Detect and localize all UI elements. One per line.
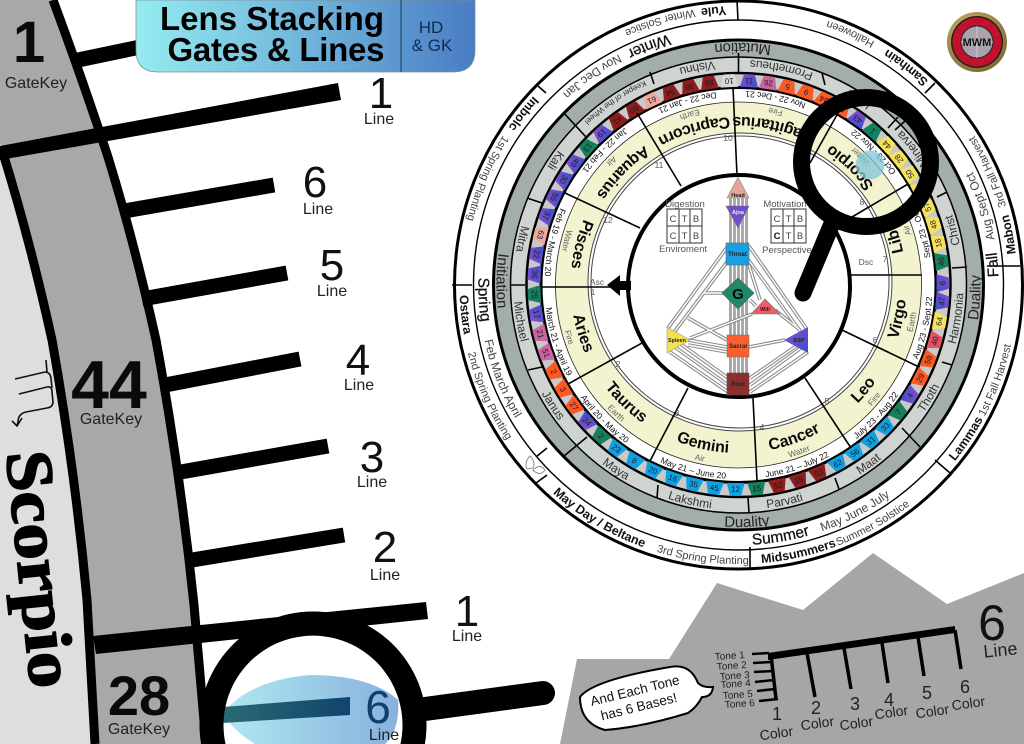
digestion and environment grid: T (682, 231, 688, 242)
line numbers: 6 (303, 158, 327, 207)
gate band: 59 (923, 354, 935, 366)
motivation and perspective grid: Perspective (762, 245, 812, 256)
line numbers: 2 (373, 523, 397, 572)
gate band: 14 (835, 102, 848, 115)
center: spleen (667, 327, 690, 353)
digestion and environment grid: B (693, 231, 699, 242)
gate band: 27 (568, 400, 581, 413)
line numbers: Line (303, 201, 333, 218)
gate band: 17 (531, 309, 541, 320)
gate band: 3 (558, 385, 568, 394)
arrow: ascendant pointer (607, 275, 631, 296)
center: ESP: ESP (793, 338, 805, 344)
motivation and perspective grid: B (797, 214, 803, 225)
zodiac elements: Water (787, 443, 811, 460)
big 6 line label: 6 (978, 595, 1006, 651)
tone labels: Tone 1 (714, 650, 746, 663)
gate band: 12 (731, 485, 741, 494)
motivation and perspective grid: T (786, 231, 792, 242)
season names and months: Spring (475, 278, 490, 322)
gate band: 44 (880, 138, 893, 151)
date ring labels: March 21 - April 19 (544, 307, 575, 377)
date ring labels: June 21 – July 22 (764, 449, 831, 479)
magnifier: upper lens on Scorpio (802, 98, 930, 293)
season names and months: Aug Sept Oct (966, 172, 995, 240)
motivation and perspective grid: Motivation (763, 199, 807, 210)
zodiac elements: Fire (563, 329, 576, 346)
house numbers: Dsc (859, 257, 874, 267)
color labels: 6 (960, 677, 970, 697)
color labels: Color (800, 713, 835, 733)
gate band: 18 (933, 237, 944, 248)
center: sacral: Sacral (729, 344, 747, 350)
center: G: G (732, 286, 744, 303)
archetype ring labels: Vishnu (680, 62, 716, 74)
line numbers: Line (357, 474, 387, 491)
gate band: 48 (928, 218, 939, 230)
gate band: 64 (934, 316, 945, 327)
tone labels: Tone 6 (724, 698, 756, 711)
season names and months: Fall (985, 253, 999, 276)
gate band: 51 (540, 348, 552, 359)
archetype ring labels: Christ (941, 213, 963, 247)
archetype ring labels: Hera (844, 87, 873, 113)
tone labels: Tone 4 (720, 678, 752, 691)
line numbers: Line (452, 628, 482, 645)
gate band: 53 (813, 467, 825, 479)
house dividers (541, 87, 922, 481)
outer season labels: Lammas (948, 417, 982, 461)
center: ajna (726, 206, 749, 228)
gate band: 62 (832, 457, 844, 470)
gate band: 41 (611, 114, 624, 127)
house numbers: 3 (675, 408, 680, 418)
gate band: 63 (535, 229, 546, 241)
outer season labels: Midsummers (762, 540, 836, 563)
season row dividers (452, 0, 1020, 570)
line numbers: 5 (320, 241, 344, 290)
motivation and perspective grid: B (797, 231, 803, 242)
house numbers: Asc (590, 277, 605, 287)
house numbers: 1 (591, 287, 596, 297)
gate band (527, 74, 950, 496)
gate band: 19 (595, 127, 608, 140)
date ring labels (544, 91, 932, 478)
zodiac sign names: Leo (848, 374, 879, 406)
gate band: 33 (879, 420, 892, 433)
zodiac elements: Earth (678, 107, 701, 123)
outer season labels: Summer Solstice (836, 502, 909, 545)
color labels: 4 (884, 690, 894, 710)
color labels: Color (874, 702, 909, 722)
house numbers: 12 (603, 215, 613, 225)
gate band: 52 (773, 480, 784, 491)
line numbers (303, 69, 482, 645)
zodiac sign names: Aquarius (593, 142, 652, 202)
title banner: Lens Stacking (160, 0, 384, 37)
gate band: 9 (802, 87, 810, 97)
digestion and environment grid: C (670, 214, 677, 225)
date ring labels: July 23 - Aug 22 (851, 390, 900, 441)
gate 1 label: 1 (13, 10, 45, 75)
archetype ring labels: Keeper of the Wheel (584, 80, 646, 126)
outer season labels: May Day / Beltane (553, 487, 645, 547)
line numbers: Line (317, 283, 347, 300)
gate band: 38 (684, 81, 695, 92)
center: throat (726, 243, 749, 265)
gate 44 label: GateKey (80, 411, 142, 428)
archetype ring labels: Maat (856, 454, 882, 474)
date ring labels: Dec 22 - Jan 21 (657, 90, 717, 116)
center: throat: Throat (728, 252, 747, 258)
digestion and environment grid: B (693, 214, 699, 225)
bottom right grey panel: tones and colors (560, 553, 1024, 744)
zodiac sign names: Capricorn (655, 113, 731, 149)
house numbers: 2 (616, 359, 621, 369)
archetype ring labels: Minerva (893, 128, 930, 170)
archetype ring labels: Prometheus (749, 57, 814, 83)
panel: Scorpio gate scale (0, 0, 482, 744)
center: head: Head (731, 193, 745, 199)
gate band: 16 (667, 473, 679, 484)
outer season labels: Samhain (885, 49, 928, 86)
callout: speech bubble (580, 666, 713, 730)
house numbers (590, 133, 888, 432)
gate band: 30 (557, 173, 570, 186)
gate band: 31 (865, 434, 878, 447)
gate band: 58 (704, 78, 714, 88)
gate band: 54 (664, 87, 676, 98)
gate band: 20 (647, 465, 659, 477)
digestion and environment grid: T (682, 214, 688, 225)
digestion and environment grid (659, 199, 707, 255)
motivation and perspective grid: C (774, 214, 781, 225)
archetype ring labels: Maya (602, 458, 628, 480)
zodiac elements (562, 108, 916, 462)
house numbers: 10 (723, 133, 733, 143)
gate band: 23 (610, 443, 623, 455)
archetype ring labels (514, 60, 964, 508)
gate band: 46 (937, 256, 947, 266)
house numbers: 5 (825, 396, 830, 406)
center: will: Will (760, 307, 770, 313)
color labels: 3 (850, 694, 860, 714)
gate band: 10 (724, 76, 734, 86)
season names and months: Feb March April (484, 340, 522, 418)
archetype ring labels: Mitra (516, 226, 530, 252)
color labels: 2 (811, 698, 821, 718)
zodiac elements: Air (694, 452, 706, 464)
title banner: Gates & Lines (168, 31, 384, 68)
quarter labels: Mutation (715, 42, 770, 56)
tone labels (714, 650, 756, 711)
season names and months: Nov Dec Jan (563, 54, 622, 97)
archetype ring labels: Kali (548, 150, 564, 171)
outer season labels: 1st Spring Planting (466, 136, 508, 221)
gate band: 35 (688, 479, 699, 490)
zodiac elements: Fire (767, 106, 784, 118)
zodiac elements: Earth (606, 402, 627, 424)
ruler of colors and tones (752, 626, 961, 701)
gate and line bars (0, 46, 428, 654)
zodiac elements: Air (604, 154, 619, 169)
season names and months (475, 35, 999, 545)
gate 1 label (5, 10, 67, 92)
gate band: 32 (913, 184, 926, 196)
zodiac elements: Fire (866, 390, 883, 408)
gate band: 29 (914, 372, 927, 384)
line numbers: 3 (360, 433, 384, 482)
center: G (722, 278, 754, 309)
outer season labels: Yule (701, 6, 726, 17)
gate band: 56 (849, 446, 862, 459)
color labels: 5 (922, 683, 932, 703)
gate band: 36 (530, 270, 539, 280)
gate band: 4 (905, 391, 916, 400)
archetype ring labels: Lakshmi (668, 491, 712, 508)
outer season labels: Ostara (460, 296, 470, 335)
channels (668, 195, 808, 392)
gate band: 60 (627, 103, 640, 116)
zodiac sign names: Pisces (567, 218, 596, 270)
archetype ring labels: Harmonia (948, 293, 964, 344)
date ring labels: April 20 - May 20 (579, 393, 631, 445)
line numbers: Line (370, 567, 400, 584)
center: head (727, 177, 749, 199)
zodiac sign names: Taurus (602, 379, 650, 426)
tone labels: Tone 5 (722, 689, 754, 702)
gate 28 label: GateKey (108, 721, 170, 738)
digestion and environment grid: Digestion (665, 199, 705, 210)
color labels (759, 677, 986, 743)
center: will (751, 299, 780, 314)
magnifier: lower lens on line 6: 6 (365, 681, 391, 733)
archetype ring labels: Michael (514, 302, 530, 342)
icon: leaf (526, 456, 545, 474)
gate band: 28 (893, 152, 905, 165)
gate band: 24 (580, 415, 593, 428)
gate band: 2 (548, 368, 559, 376)
house numbers: 11 (655, 160, 664, 170)
house numbers: 7 (883, 254, 888, 264)
quarter labels: Duality (725, 516, 769, 529)
panel: zodiac wheel (452, 0, 1024, 570)
icon: scorpio glyph (12, 360, 53, 426)
line numbers: 4 (346, 336, 370, 385)
center: root: Root (731, 382, 745, 388)
gate band: 1 (868, 126, 878, 136)
gate band: 25 (530, 290, 539, 300)
title banner: & GK (412, 36, 453, 55)
color labels: 1 (772, 704, 782, 724)
date ring labels: Aug 23 - Sept 22 (910, 296, 934, 360)
gate band: 8 (630, 456, 639, 466)
zodiac elements: Water (849, 145, 872, 168)
gate band: 40 (930, 335, 941, 347)
gate 44 label: 44 (71, 347, 147, 423)
zodiac sign names (572, 116, 908, 453)
gate band: 47 (937, 296, 947, 306)
gate band: 21 (535, 329, 546, 340)
title banner: HD (419, 18, 443, 37)
magnifier: lower lens on line 6: Line (369, 727, 399, 744)
center: sacral (727, 335, 749, 357)
gate band: 55 (548, 191, 560, 203)
date ring labels: Nov 22 - Dec 21 (745, 89, 807, 111)
gate band: 22 (531, 249, 542, 260)
center: ESP (784, 327, 808, 353)
gate band: 6 (938, 280, 947, 285)
logo: MWM badge (947, 12, 1007, 72)
gate band: 37 (540, 210, 552, 222)
tone labels: Tone 3 (719, 670, 751, 683)
gate band: 45 (709, 483, 720, 493)
gate band: 34 (818, 93, 830, 105)
zodiac sign names: Scorpio (823, 141, 877, 193)
date ring labels: Sept 23 - Oct 22 (905, 197, 933, 259)
line numbers: 1 (455, 587, 479, 636)
big 6 line label (978, 595, 1018, 662)
zodiac elements: Air (900, 224, 913, 237)
season names and months: Summer (752, 527, 808, 545)
gate band: 7 (894, 407, 904, 417)
motivation and perspective grid (762, 199, 812, 256)
line numbers: 1 (369, 69, 393, 118)
color labels: Color (951, 693, 986, 713)
season names and months: May June July (820, 491, 888, 531)
zodiac sign names: Aries (569, 312, 597, 355)
title banner (136, 0, 475, 72)
digestion and environment grid: Enviroment (659, 244, 707, 255)
gate 28 label: 28 (108, 664, 170, 727)
gate band: 61 (645, 94, 658, 106)
outer season labels: 2nd Spring Planting (468, 352, 512, 440)
gate band: 26 (763, 78, 774, 88)
motivation and perspective grid: T (786, 214, 792, 225)
center: root (727, 373, 749, 395)
date ring labels: Oct 23 - Nov 22 (849, 127, 898, 177)
big 6 line label: Line (982, 638, 1018, 662)
gate band: 11 (744, 76, 754, 86)
outer season labels: Winter Solstice (625, 10, 696, 35)
tone labels: Tone 2 (716, 660, 748, 673)
gate band: 49 (568, 156, 581, 169)
house numbers: 8 (860, 197, 865, 207)
outer season labels: Mabon (1002, 215, 1016, 254)
gate band: 13 (581, 141, 594, 154)
zodiac sign names: Cancer (767, 420, 823, 454)
house numbers: 6 (873, 335, 878, 345)
digestion and environment grid: C (670, 231, 677, 242)
zodiac sign names: Sagittarius (732, 113, 814, 146)
outer season labels: 3rd Fall Harvest (968, 136, 1006, 208)
gate band: 57 (921, 201, 933, 213)
outer season labels (460, 6, 1016, 566)
magnifier: lower lens on line 6 (199, 612, 543, 744)
archetype ring labels: Thoth (917, 384, 939, 410)
zodiac elements: Water (560, 229, 575, 253)
date ring labels: Feb 19 - March 20 (543, 207, 568, 277)
outer season labels: 1st Fall Harvest (979, 344, 1011, 416)
date ring labels: May 21 – June 20 (659, 455, 727, 481)
quarter labels (496, 42, 984, 529)
gate band: 5 (784, 82, 791, 91)
center: ajna: Ajna (732, 210, 745, 216)
gate band: 50 (904, 167, 916, 180)
gate band: 43 (851, 112, 864, 125)
gate band: 39 (793, 474, 805, 486)
line numbers: Line (364, 111, 394, 128)
logo: MWM badge: MWM (963, 37, 991, 49)
callout: speech bubble: has 6 Bases! (599, 690, 679, 723)
gate band: 2 (596, 431, 606, 441)
gate 1 label: GateKey (5, 75, 67, 92)
zodiac sign names: Gemini (675, 429, 730, 457)
outer season labels: 3rd Spring Planting (657, 545, 748, 566)
inner bodygraph disk (628, 175, 850, 397)
center: spleen: Spleen (668, 338, 687, 344)
color labels: Color (839, 713, 874, 733)
zodiac sign names: Libra (879, 213, 907, 255)
motivation and perspective grid: C (774, 231, 781, 242)
house numbers: 4 (760, 422, 765, 432)
season names and months: Winter (629, 35, 672, 58)
callout: speech bubble: And Each Tone (589, 672, 681, 709)
quarter labels: Duality (968, 275, 984, 320)
zodiac sign names: Virgo (885, 298, 910, 341)
archetype ring labels: Janus (542, 392, 563, 420)
color labels: Color (759, 723, 794, 743)
outer season labels: Halloween (827, 21, 874, 48)
line numbers: Line (344, 377, 374, 394)
color labels: Color (915, 701, 950, 721)
gate band: 15 (752, 484, 762, 493)
quarter labels: Initiation (496, 254, 509, 308)
outer season labels: Imbolc (509, 96, 540, 130)
archetype ring labels: Parvati (766, 492, 803, 508)
date ring labels: Jan 22 - Feb 21 (580, 126, 630, 175)
zodiac elements: Earth (904, 311, 918, 333)
